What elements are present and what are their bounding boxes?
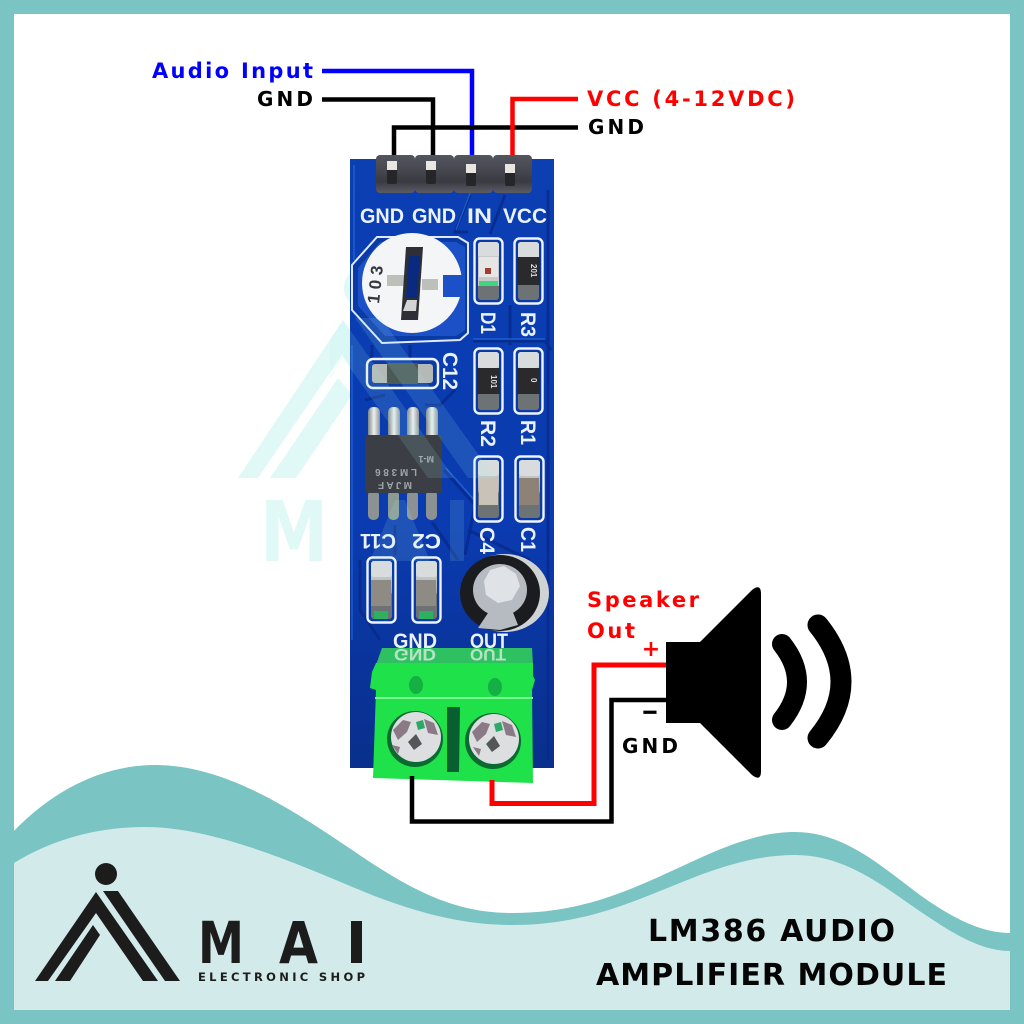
- board copper traces: [360, 190, 551, 760]
- label: GND right: GND: [588, 115, 644, 139]
- electrolytic capacitor: [460, 554, 549, 632]
- label: GND speaker: GND: [622, 734, 678, 758]
- silkscreen pin labels: [360, 205, 547, 228]
- label: Speaker Out: Out: [587, 619, 635, 643]
- capacitor C4: [474, 456, 502, 522]
- wire: VCC: [512, 99, 578, 155]
- wire: GND to second pin: [322, 100, 433, 155]
- resistor R1: 0: [529, 378, 538, 383]
- capacitor C11: [368, 558, 396, 622]
- board substrate: [350, 159, 554, 768]
- LM386 IC chip: [365, 407, 442, 520]
- wire: speaker ground: [412, 700, 667, 822]
- logo wordmark: M: [198, 909, 244, 977]
- product title: [596, 914, 947, 993]
- resistor R3: 201: [529, 264, 538, 278]
- trimmer potentiometer: 103: [364, 265, 387, 304]
- silkscreen component labels: [360, 312, 539, 653]
- capacitor C12: [367, 359, 438, 388]
- silkscreen pin labels: IN: [467, 205, 492, 228]
- silkscreen pin labels: VCC: [503, 205, 547, 228]
- product title: AMPLIFIER MODULE: [596, 958, 947, 993]
- silkscreen component labels: C1: [516, 527, 539, 552]
- silkscreen component labels: OUT: [470, 630, 508, 653]
- silkscreen pin labels: GND: [412, 205, 456, 228]
- silkscreen component labels: R3: [516, 312, 539, 337]
- logo wordmark: A: [279, 909, 318, 977]
- trimmer potentiometer: [352, 233, 468, 343]
- watermark logo: [238, 268, 495, 581]
- green screw terminal: [370, 645, 535, 783]
- logo tagline: ELECTRONIC SHOP: [198, 970, 365, 984]
- silkscreen component labels: C12: [438, 352, 461, 390]
- LM386 IC chip: M-1: [418, 454, 434, 464]
- footer light panel: [14, 827, 1010, 1010]
- silkscreen component labels: C11: [360, 529, 396, 552]
- brand logo: [35, 863, 365, 984]
- pin header: [376, 155, 532, 193]
- label: plus: +: [642, 637, 660, 662]
- label: GND left: GND: [257, 87, 313, 111]
- silkscreen component labels: R1: [516, 420, 539, 445]
- resistor R2: [474, 348, 502, 414]
- watermark tint over board: [330, 318, 495, 561]
- wire: audio input: [322, 71, 472, 155]
- silkscreen component labels: C4: [475, 527, 498, 554]
- silkscreen component labels: R2: [476, 420, 499, 447]
- LED D1: [474, 238, 502, 304]
- green screw terminal: GND: [394, 645, 436, 664]
- label: Speaker Out: [587, 588, 700, 643]
- label: minus: –: [643, 697, 657, 725]
- silkscreen component labels: C2: [412, 529, 441, 552]
- label: Speaker Out: Speaker: [587, 588, 700, 612]
- label: Audio Input: Audio Input: [152, 59, 313, 83]
- wire: speaker positive: [492, 665, 667, 804]
- logo mark: [35, 863, 180, 981]
- resistor R2: 101: [489, 375, 498, 389]
- logo wordmark: [198, 909, 362, 977]
- wire: GND to first pin: [394, 128, 578, 155]
- resistor R1: [514, 348, 542, 414]
- resistor R3: [514, 238, 542, 304]
- green screw terminal: OUT: [470, 645, 507, 664]
- product title: LM386 AUDIO: [648, 914, 895, 949]
- watermark logo: A: [352, 483, 430, 581]
- watermark logo: M: [260, 483, 328, 581]
- silkscreen component labels: D1: [476, 312, 499, 334]
- label: VCC: VCC (4-12VDC): [587, 87, 795, 111]
- icon: speaker: [666, 587, 841, 778]
- capacitor C2: [412, 558, 440, 622]
- capacitor C1: [516, 456, 544, 522]
- LM386 IC chip: LM386: [375, 466, 417, 477]
- silkscreen pin labels: GND: [360, 205, 404, 228]
- LM386 circuit board: [330, 155, 554, 783]
- footer wave band: [13, 765, 1011, 1011]
- silkscreen component labels: GND: [393, 630, 437, 653]
- LM386 IC chip: MJAF: [378, 479, 412, 490]
